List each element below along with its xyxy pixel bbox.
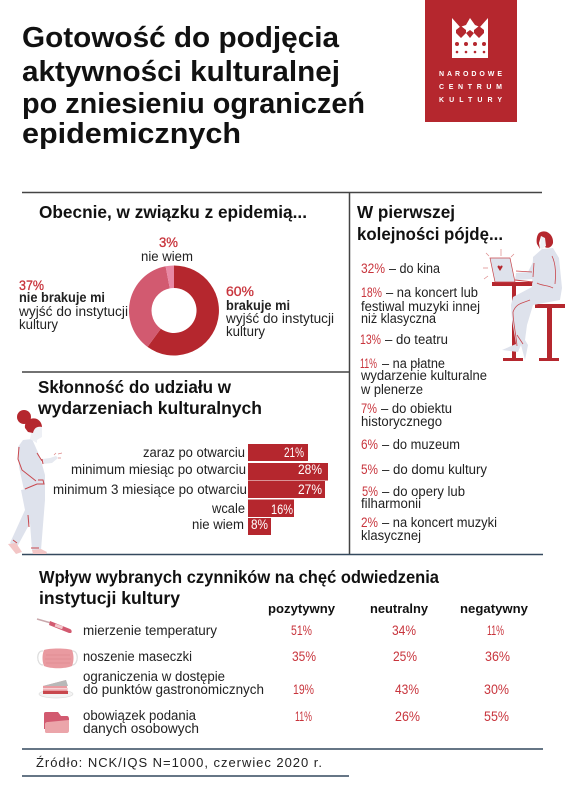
bar: nie wiem 8%: 8% [251, 517, 268, 532]
bar: nie wiem 8% [192, 517, 271, 535]
item: opera lub filharmonia [361, 484, 465, 511]
item: płatne wydarzenie [360, 356, 487, 397]
logo: Narodowe Centrum Kultury [425, 0, 517, 122]
item: dom kultury: – do domu kultury [382, 462, 487, 477]
logo: Narodowe Centrum Kultury: KULTURY [439, 97, 502, 104]
row: ograniczenia gastronomia: do punktów gastronomicznych [83, 682, 264, 697]
icon: folder [44, 712, 69, 733]
item: kino: 32% [361, 261, 385, 276]
label: 37% [18, 277, 128, 332]
item: koncert lub festiwal: festiwal muzyki innej [361, 299, 480, 314]
bar: zaraz po otwarciu 21% [143, 444, 308, 461]
logo: Narodowe Centrum Kultury: CENTRUM [439, 84, 502, 91]
item: obiekt historyczny: – do obiektu [381, 401, 452, 416]
bar: wcale 16%: wcale [211, 501, 245, 516]
label: 60%: wyjść do instytucji [225, 311, 334, 326]
row: ograniczenia gastronomia: 19% [293, 682, 314, 697]
row: ograniczenia gastronomia: ograniczenia w dostępie [83, 669, 225, 684]
item: kino: – do kina [389, 261, 440, 276]
label: 60% [225, 283, 334, 339]
item: muzyka klasyczna: klasycznej [361, 528, 421, 543]
bar: zaraz po otwarciu 21%: zaraz po otwarciu [143, 445, 245, 460]
bar: minimum miesiąc po otwarciu 28%: 28% [298, 462, 322, 477]
label: 60%: kultury [226, 324, 265, 339]
label: 37%: nie brakuje mi [19, 290, 105, 305]
figure: woman at laptop [483, 231, 565, 361]
row: mierzenie temperatury: 11% [487, 623, 504, 638]
item: muzyka klasyczna: 2% [361, 515, 378, 530]
bar: minimum miesiąc po otwarciu 28% [71, 462, 328, 480]
title [22, 22, 365, 150]
item: teatr: – do teatru [385, 332, 448, 347]
row: noszenie maseczki: 36% [485, 649, 510, 664]
row: ograniczenia gastronomia [83, 669, 509, 697]
row: mierzenie temperatury: 34% [392, 623, 416, 638]
heading: first I will go to: kolejności pójdę... [357, 224, 503, 244]
row: dane osobowe: obowiązek podania [83, 708, 196, 723]
column headers [268, 602, 528, 616]
row: noszenie maseczki [83, 649, 510, 664]
title: epidemicznych [22, 118, 241, 150]
bar: minimum 3 miesiące po otwarciu 27% [53, 481, 325, 498]
logo: Narodowe Centrum Kultury: NARODOWE [439, 71, 502, 78]
item: opera lub filharmonia: filharmonii [361, 496, 421, 511]
item: płatne wydarzenie: w plenerze [360, 382, 423, 397]
column headers: pozytywny [268, 602, 335, 616]
grid lines [22, 192, 543, 776]
label: 60%: brakuje mi [226, 298, 290, 313]
item: koncert lub festiwal: – na koncert lub [386, 285, 478, 300]
item: opera lub filharmonia: 5% [362, 484, 378, 499]
row: dane osobowe: danych osobowych [83, 721, 199, 736]
bar: minimum miesiąc po otwarciu 28%: minimum miesiąc po otwarciu [71, 462, 246, 477]
column headers: neutralny [370, 602, 428, 616]
panel: current situation [18, 202, 334, 355]
label: 37%: 37% [19, 277, 44, 293]
bar: minimum 3 miesiące po otwarciu 27%: 27% [298, 482, 322, 497]
row: dane osobowe: 55% [484, 709, 509, 724]
row: dane osobowe: 26% [395, 709, 420, 724]
row: noszenie maseczki: 35% [292, 649, 316, 664]
bar: wcale 16%: 16% [271, 502, 293, 517]
figure: woman with phone [8, 410, 62, 554]
label: 3% [141, 234, 193, 264]
item: koncert lub festiwal: 18% [361, 285, 382, 300]
item: płatne wydarzenie: – na płatne [382, 356, 445, 371]
heading: willingness to attend: Skłonność do udziału w [38, 377, 231, 397]
bar: nie wiem 8%: nie wiem [192, 517, 244, 532]
item: koncert lub festiwal [361, 285, 480, 326]
panel: first I will go to [357, 202, 565, 543]
donut chart [129, 266, 219, 355]
bar: wcale 16% [211, 500, 294, 517]
heading: factors [39, 567, 439, 608]
label: 3%: nie wiem [141, 249, 193, 264]
item: muzyka klasyczna: – na koncert muzyki [382, 515, 497, 530]
item: dom kultury: 5% [361, 462, 378, 477]
list of first choices [360, 261, 497, 543]
item: obiekt historyczny: historycznego [361, 414, 442, 429]
heading: willingness to attend: wydarzeniach kulturalnych [37, 398, 262, 418]
icon: thermometer [37, 619, 72, 633]
item: opera lub filharmonia: – do opery lub [382, 484, 465, 499]
item: kino [361, 261, 440, 276]
row: ograniczenia gastronomia: 30% [484, 682, 509, 697]
label: 60%: 60% [226, 283, 254, 299]
heading: current situation: Obecnie, w związku z epidemią... [39, 202, 307, 222]
item: obiekt historyczny [361, 401, 452, 429]
row: noszenie maseczki: 25% [393, 649, 417, 664]
row: ograniczenia gastronomia: 43% [395, 682, 419, 697]
row: mierzenie temperatury: mierzenie temperatury [83, 623, 217, 638]
label: 37%: kultury [19, 317, 58, 332]
item: muzeum: – do muzeum [382, 437, 460, 452]
row: mierzenie temperatury [83, 623, 504, 638]
item: koncert lub festiwal: niż klasyczna [361, 311, 436, 326]
label: 37%: wyjść do instytucji [18, 304, 128, 319]
heading: first I will go to [357, 202, 503, 244]
column headers: negatywny [460, 602, 528, 616]
icon: face mask [38, 648, 77, 668]
item: teatr: 13% [360, 332, 381, 347]
title: aktywności kulturalnej [22, 56, 340, 88]
title: po zniesieniu ograniczeń [22, 88, 365, 120]
heading: factors: instytucji kultury [39, 588, 180, 608]
item: muzeum: 6% [361, 437, 378, 452]
row: dane osobowe [83, 708, 509, 736]
row: noszenie maseczki: noszenie maseczki [83, 649, 192, 664]
item: muzyka klasyczna [361, 515, 497, 543]
row: mierzenie temperatury: 51% [291, 623, 312, 638]
bar: minimum 3 miesiące po otwarciu 27%: minimum 3 miesiące po otwarciu [53, 482, 247, 497]
heading: factors: Wpływ wybranych czynników na chęć odwiedzenia [39, 567, 439, 587]
title: Gotowość do podjęcia [22, 22, 340, 54]
icon: cake [39, 680, 73, 698]
bar: zaraz po otwarciu 21%: 21% [284, 445, 304, 460]
heading: willingness to attend [37, 377, 262, 418]
bar chart [53, 444, 328, 535]
source: Źródło: NCK/IQS N=1000, czerwiec 2020 r. [36, 755, 322, 770]
label: 3%: 3% [159, 234, 178, 250]
panel: factors [37, 567, 528, 736]
heading: first I will go to: W pierwszej [357, 202, 455, 222]
panel: willingness to attend [8, 377, 328, 554]
item: obiekt historyczny: 7% [361, 401, 377, 416]
row: dane osobowe: 11% [295, 709, 312, 724]
item: płatne wydarzenie: wydarzenie kulturalne [360, 368, 487, 383]
item: płatne wydarzenie: 11% [360, 356, 377, 371]
